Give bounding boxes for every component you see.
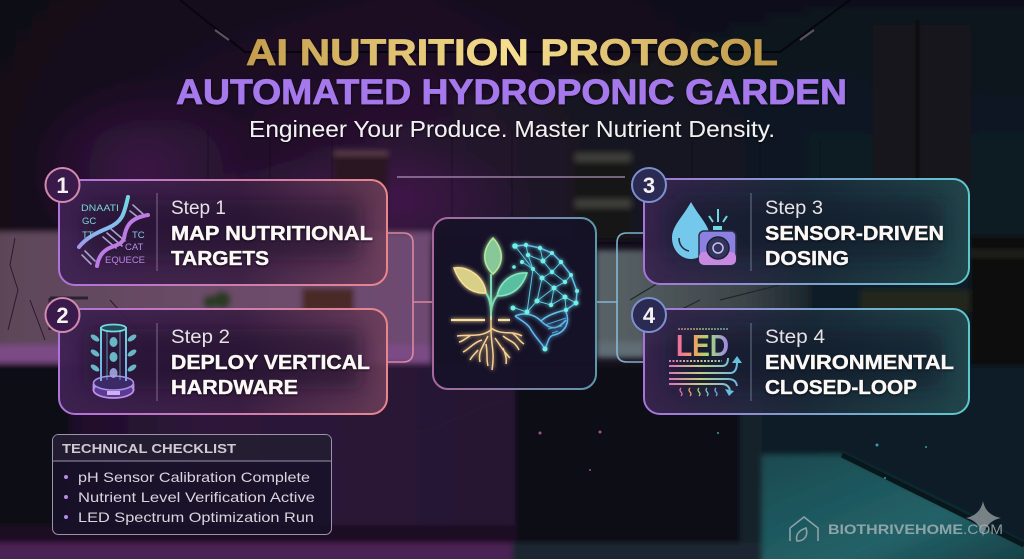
- step title: SENSOR-DRIVEN: [765, 223, 944, 245]
- badge 2: [46, 298, 80, 332]
- step title: ENVIRONMENTAL: [765, 352, 954, 374]
- island and lower cabinets: [0, 363, 70, 543]
- connector top line: [397, 176, 625, 178]
- crisp scene details: [180, 0, 850, 52]
- icon: DNA helix: TT: [82, 230, 94, 241]
- step title: DEPLOY VERTICAL: [171, 352, 370, 374]
- icon: DNA helix: DNAATI: [81, 203, 119, 214]
- step label: Step 1: [171, 198, 226, 219]
- step title: CLOSED-LOOP: [765, 377, 917, 399]
- right backsplash marble: [596, 250, 810, 345]
- logo: biothrivehome: .COM: [963, 521, 1003, 537]
- checklist items: Nutrient Level Verification Active: [78, 489, 315, 505]
- heading: [176, 32, 847, 142]
- badge 4: [632, 298, 666, 332]
- backsplash objects: [302, 288, 354, 312]
- left backsplash marble: [0, 232, 432, 347]
- icon: LED and airflow: LED: [676, 328, 729, 363]
- step label: Step 4: [765, 327, 825, 348]
- panel: step 1: [59, 180, 387, 285]
- icon: droplet and sensor: [672, 202, 736, 265]
- checklist items: LED Spectrum Optimization Run: [78, 509, 314, 525]
- badge 3: [632, 168, 666, 202]
- title line 2: AUTOMATED HYDROPONIC GARDEN: [176, 73, 847, 112]
- step label: Step 2: [171, 327, 230, 348]
- checklist items: pH Sensor Calibration Complete: [78, 469, 310, 485]
- badge 2: 2: [56, 303, 69, 328]
- icon: DNA helix: EQUECE: [105, 255, 145, 266]
- counter: [0, 345, 432, 363]
- icon: house with leaf: [790, 517, 818, 541]
- icon: DNA helix: [79, 197, 148, 266]
- step title: [171, 352, 370, 399]
- icon: LED and airflow: [669, 328, 742, 396]
- step title: [765, 223, 944, 270]
- panel: technical checklist: [52, 434, 332, 534]
- badge 1: 1: [56, 173, 69, 198]
- shelves: [334, 152, 388, 212]
- floor: [762, 455, 1024, 559]
- step title: [171, 223, 373, 270]
- badge 1: [46, 168, 80, 202]
- connectors left: [387, 233, 433, 362]
- badge 3: 3: [643, 173, 655, 198]
- title line 1: AI NUTRITION PROTOCOL: [246, 32, 778, 73]
- panel: step 2: [59, 309, 387, 414]
- logo: biothrivehome: BIOTHRIVEHOME: [828, 521, 963, 537]
- checklist heading: TECHNICAL CHECKLIST: [62, 441, 236, 456]
- step title: [765, 352, 954, 399]
- icon: neural brain: [510, 243, 579, 352]
- icon: plant with roots: [451, 238, 527, 370]
- step label: Step 3: [765, 198, 823, 219]
- step title: DOSING: [765, 248, 849, 270]
- connectors right: [596, 233, 644, 362]
- step title: MAP NUTRITIONAL: [171, 223, 373, 245]
- step title: HARDWARE: [171, 377, 298, 399]
- panel: step 4: [644, 309, 969, 414]
- step title: TARGETS: [171, 248, 269, 270]
- watermark sparkle: [966, 501, 1001, 537]
- panel: central AI plant brain: [433, 218, 596, 389]
- panel: step 3: [644, 179, 969, 284]
- icon: DNA helix: TC: [132, 230, 145, 241]
- right wall and appliance: [800, 240, 1024, 559]
- icon: DNA helix: GC: [82, 216, 96, 227]
- icon: vertical tower: [89, 324, 138, 398]
- checklist items: [64, 469, 315, 525]
- tall glass cabinets: [873, 25, 971, 240]
- badge 4: 4: [643, 303, 656, 328]
- tagline: Engineer Your Produce. Master Nutrient Density.: [249, 116, 775, 142]
- icon: DNA helix: CAT: [125, 242, 143, 253]
- logo: biothrivehome: [790, 517, 1003, 541]
